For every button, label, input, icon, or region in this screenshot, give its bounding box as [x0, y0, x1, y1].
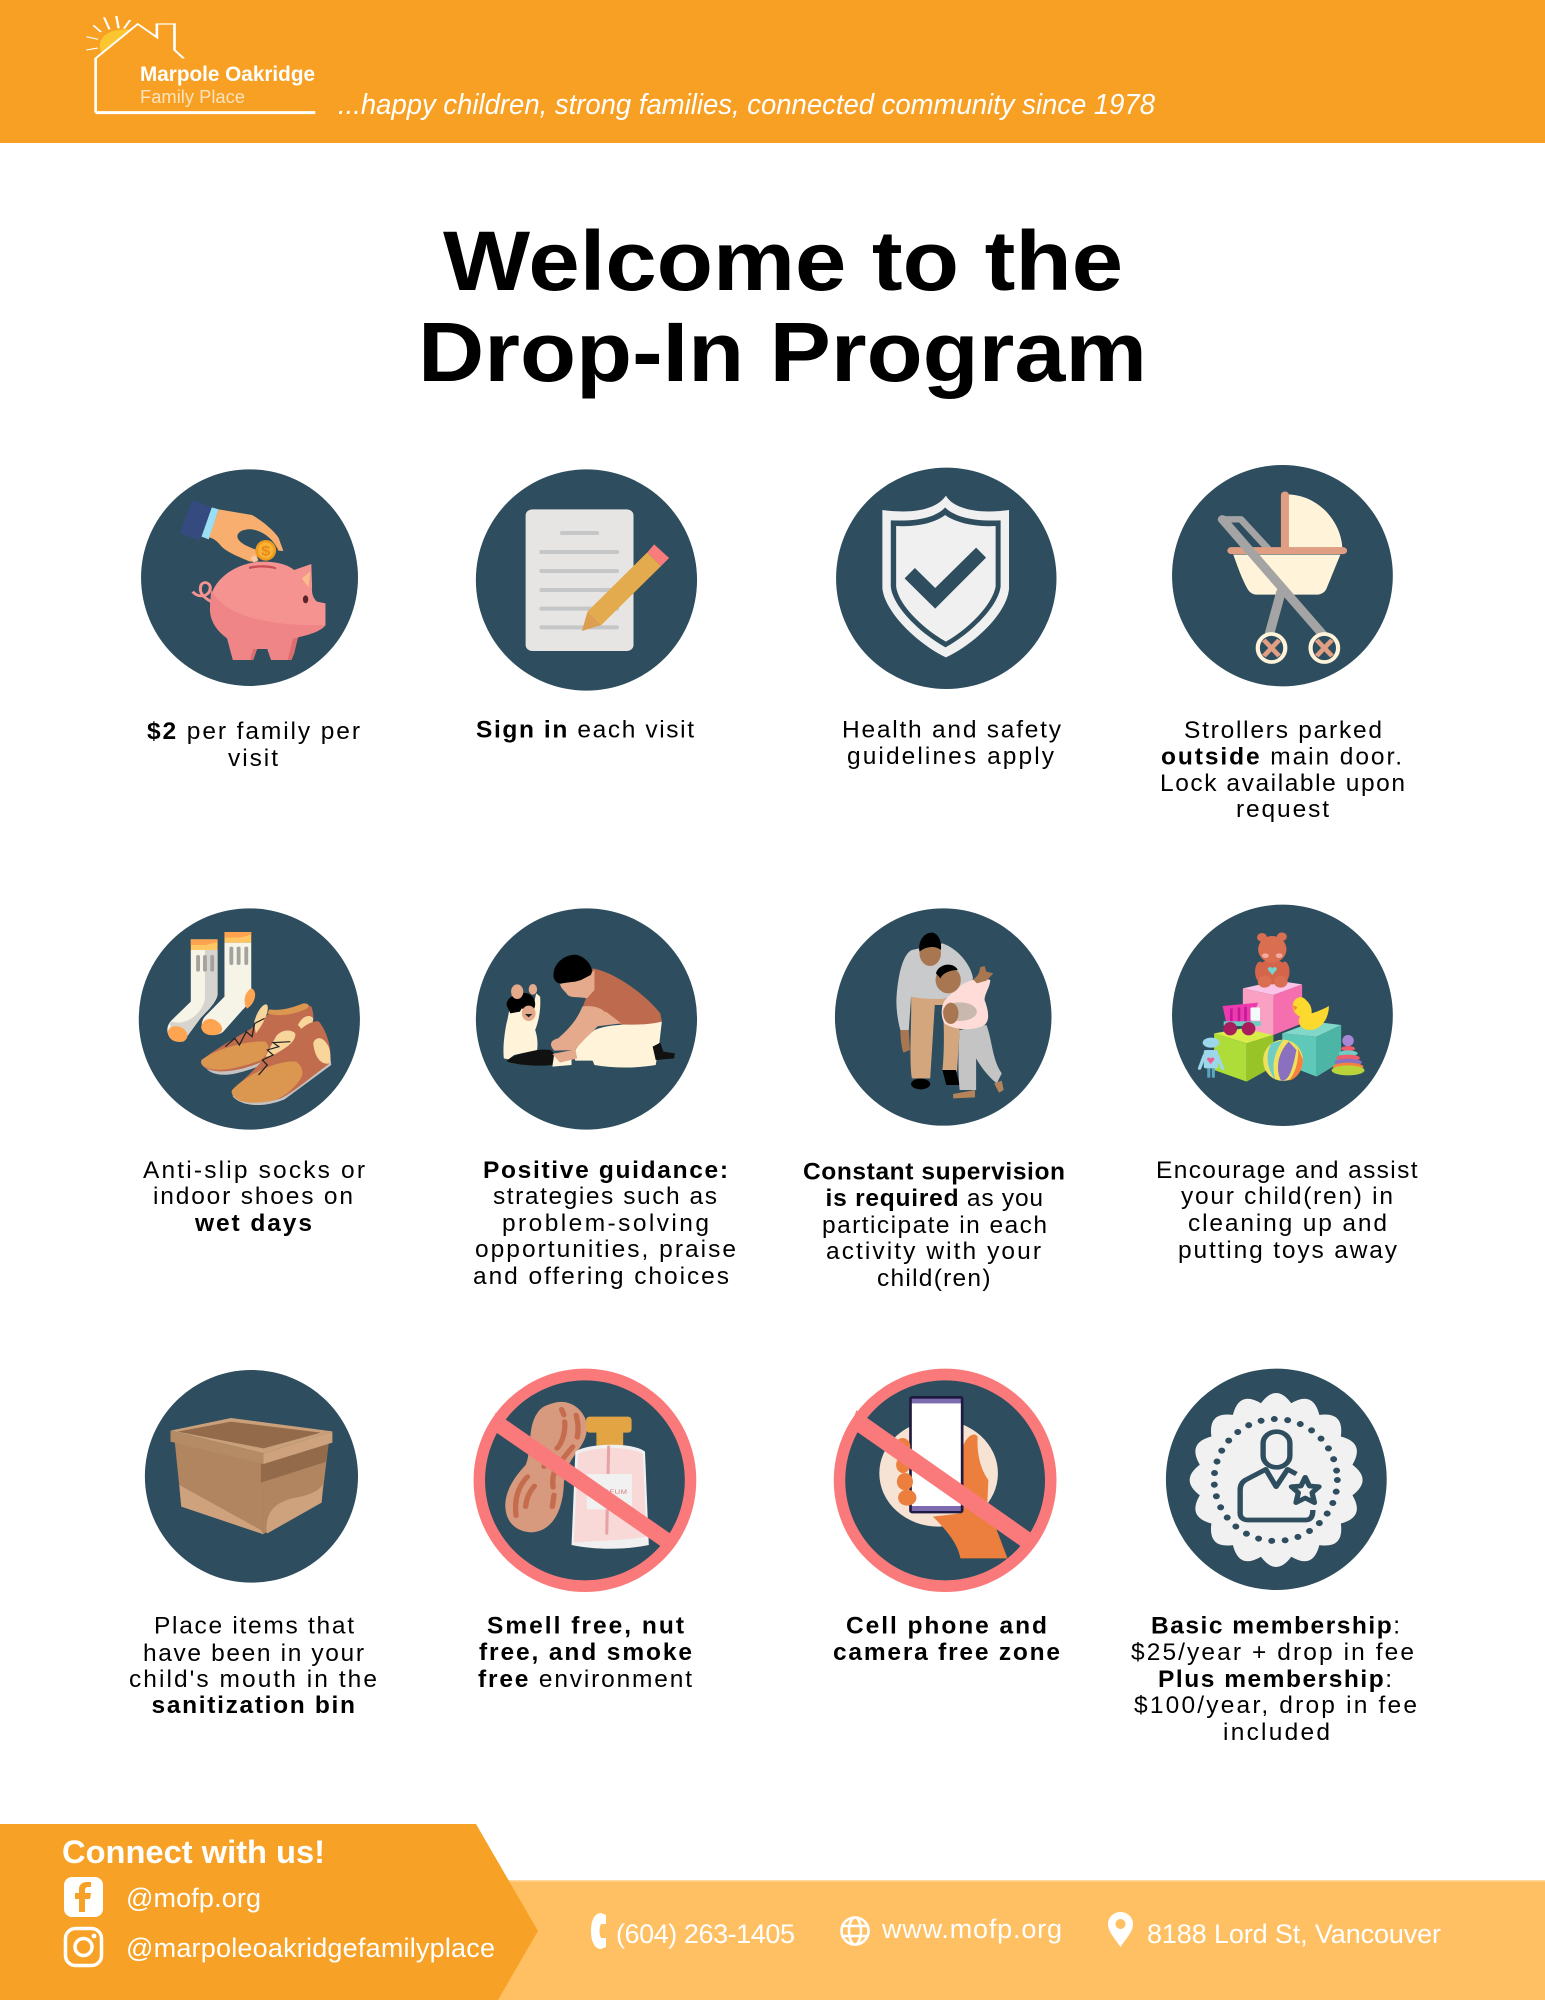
header bar [0, 0, 1545, 143]
caption: footwear [143, 1157, 365, 1237]
instagram row [66, 1928, 495, 1966]
footer [0, 1824, 1545, 2000]
icon: cardboard bin [145, 1370, 358, 1583]
caption: smell free [478, 1612, 692, 1693]
caption: smell free: free environment [478, 1666, 692, 1693]
caption: sanitization: sanitization bin [152, 1692, 355, 1719]
panel: phone free [833, 1369, 1060, 1666]
panel: positive guidance [473, 908, 736, 1290]
caption: tidying up: your child(ren) in [1181, 1183, 1393, 1210]
caption: membership: Basic membership: [1151, 1612, 1400, 1640]
caption: membership: included [1223, 1719, 1330, 1746]
caption: fee [147, 718, 360, 772]
panel: strollers [1160, 465, 1405, 823]
caption: fee: $2 per family per [147, 718, 360, 745]
logo: Marpole Oakridge [140, 63, 315, 86]
contact band [480, 1880, 1545, 2000]
panel: health and safety [836, 468, 1062, 770]
caption: strollers: outside main door. [1161, 744, 1402, 770]
caption: phone free: camera free zone [833, 1639, 1060, 1666]
panel: smell free [474, 1369, 696, 1693]
caption: footwear: Anti-slip socks or [143, 1157, 365, 1184]
caption: supervision: child(ren) [877, 1265, 990, 1292]
icon: no peanut or perfume [474, 1369, 696, 1592]
caption: sanitization: have been in your [143, 1640, 364, 1667]
icon: hand and piggy bank [141, 469, 358, 686]
caption: smell free: free, and smoke [479, 1639, 692, 1666]
address contact: 8188 Lord St, Vancouver [1147, 1919, 1441, 1949]
caption: supervision: Constant supervision [803, 1158, 1065, 1186]
instagram row: @marpoleoakridgefamilyplace [126, 1933, 495, 1963]
caption: phone free: Cell phone and [846, 1612, 1047, 1640]
caption: positive guidance: opportunities, praise [475, 1236, 736, 1263]
caption: tidying up: cleaning up and [1188, 1210, 1387, 1237]
title [418, 214, 1147, 399]
icon: member badge [1166, 1369, 1387, 1590]
caption: membership [1131, 1612, 1417, 1746]
caption: membership: $25/year + drop in fee [1131, 1639, 1414, 1666]
panel: fee [141, 469, 360, 772]
title: Drop-In Program [418, 305, 1147, 399]
caption: smell free: Smell free, nut [487, 1612, 684, 1640]
caption: positive guidance: strategies such as [493, 1183, 717, 1210]
caption: health and safety: Health and safety [842, 717, 1062, 744]
caption: footwear: wet days [194, 1210, 312, 1237]
panel: membership [1131, 1369, 1417, 1746]
caption: tidying up [1156, 1157, 1418, 1264]
caption: fee: visit [228, 745, 278, 772]
icon: document and pencil [476, 469, 697, 691]
facebook row [64, 1877, 261, 1917]
title: Welcome to the [443, 214, 1123, 308]
connect arrow panel [0, 1824, 538, 2000]
caption: sanitization: child's mouth in the [129, 1666, 377, 1693]
icon: father and toddler [476, 908, 697, 1130]
caption: strollers: Strollers parked [1184, 717, 1382, 744]
caption: positive guidance: and offering choices [473, 1263, 729, 1290]
caption: positive guidance: problem-solving [502, 1210, 709, 1237]
icon: adult supervising child [835, 908, 1052, 1126]
phone contact: (604) 263-1405 [616, 1919, 795, 1949]
caption: tidying up: putting toys away [1178, 1237, 1398, 1264]
caption: health and safety: guidelines apply [847, 743, 1055, 770]
caption: strollers [1160, 717, 1405, 823]
caption: supervision: is required as you [826, 1185, 1043, 1212]
caption: strollers: request [1236, 796, 1329, 823]
caption: phone free [833, 1612, 1060, 1666]
icon: hand and piggy bank: $ [261, 543, 271, 559]
panel: footwear [139, 908, 365, 1237]
logo [86, 16, 315, 113]
caption: positive guidance [473, 1157, 736, 1290]
panel: tidying up [1156, 905, 1418, 1264]
caption: supervision: activity with your [826, 1238, 1041, 1265]
icon: socks and shoes [139, 908, 360, 1130]
panel: sign in [476, 469, 697, 744]
icon: shield with check [836, 468, 1056, 689]
caption: sanitization: Place items that [154, 1612, 354, 1640]
caption: strollers: Lock available upon [1160, 770, 1405, 797]
icon: baby stroller [1172, 465, 1393, 686]
caption: footwear: indoor shoes on [153, 1183, 353, 1210]
caption: supervision: participate in each [822, 1212, 1047, 1239]
website contact: www.mofp.org [881, 1914, 1062, 1944]
icon: toys and blocks [1172, 905, 1393, 1126]
caption: supervision [803, 1158, 1065, 1292]
caption: tidying up: Encourage and assist [1156, 1157, 1418, 1184]
icon: no cell phone [834, 1369, 1056, 1592]
logo: Family Place [140, 87, 245, 107]
caption: sign in: Sign in each visit [476, 716, 694, 744]
caption: membership: Plus membership: [1158, 1666, 1392, 1693]
caption: sanitization [129, 1612, 377, 1719]
caption: membership: $100/year, drop in fee [1134, 1692, 1417, 1719]
caption: health and safety [842, 717, 1062, 770]
tagline: ...happy children, strong families, connected community since 1978 [338, 89, 1155, 121]
caption: positive guidance: Positive guidance: [483, 1157, 728, 1184]
connect heading: Connect with us! [62, 1834, 325, 1870]
panel: supervision [803, 908, 1065, 1292]
facebook row: @mofp.org [126, 1883, 261, 1913]
icon: no peanut or perfume: PARFUM [593, 1488, 627, 1496]
panel: sanitization [129, 1370, 377, 1719]
